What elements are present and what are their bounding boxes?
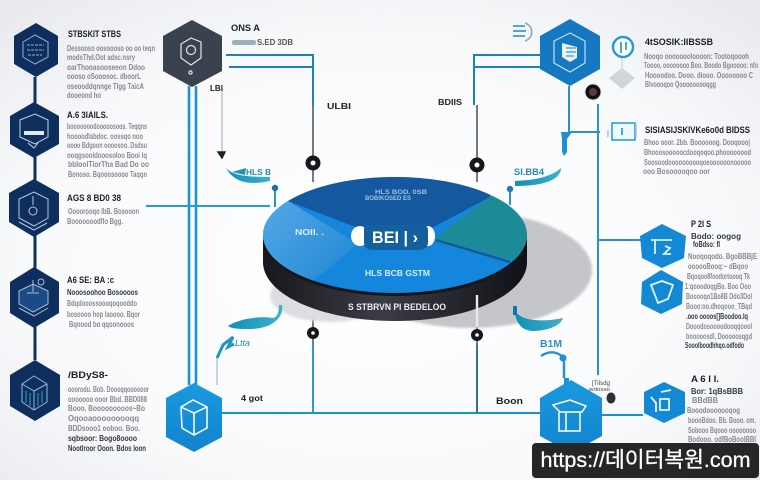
text block: right 3: P 2I S [691, 219, 711, 229]
text block: right 3 [685, 219, 758, 350]
grey pillar lines [217, 88, 477, 385]
text block: left 5: Booo. Booooooooos~Bo [68, 404, 145, 413]
left hexagon connector [34, 77, 36, 360]
icon: stripes top [513, 23, 532, 41]
text block: left 1: STBSKIT STBS [68, 29, 121, 39]
hexagon: right middle [641, 270, 683, 314]
text block: left 2: A.6 3IAILS. [67, 110, 108, 120]
text block: right 2: ooo Bosooooqoo oor [643, 167, 710, 176]
free labels: BDIIS [438, 98, 463, 107]
icon: spiral book [19, 192, 48, 230]
text block: right 1: 4tSOSIK:IIBSSB [645, 37, 713, 47]
hexagon: top right [540, 19, 600, 86]
text block: left 1: modsThd.Oot adsc.nsry [67, 53, 135, 62]
text block: left 5: ooooooo ooor Bbd. BBD088 [68, 395, 147, 404]
swoosh: top right: SI.BB4 [514, 167, 544, 177]
horizontal connector lines [146, 55, 643, 415]
text block: right 3: Bodo: oogog [691, 232, 741, 241]
icon: open box [553, 400, 586, 431]
text block: left 2: ooqgsooidooosoloo Booi lq [67, 151, 147, 160]
swoosh: top left [226, 168, 278, 207]
icon: fork and cup [651, 390, 671, 412]
wedge labels: HLS BCB GSTM [365, 269, 430, 278]
text block: left 3: Booooooodflo Bgg. [67, 217, 123, 226]
wedge: bottom base [263, 177, 527, 293]
text block: left 4: Bdqdooossoooqoqooddo [67, 299, 137, 308]
label: top centre: S.ED 3DB [257, 38, 293, 47]
text block: right 4: BBdBB [692, 396, 718, 405]
icon: blue funnel [561, 132, 572, 156]
pie chart disc [263, 177, 527, 321]
wedge labels: NOII. . [295, 228, 324, 237]
label: top centre [231, 23, 293, 47]
wedge labels [295, 189, 446, 312]
icon: box [181, 400, 207, 435]
hexagon: left 1 [14, 23, 58, 77]
free labels: LBI [210, 84, 223, 93]
disc top surface [263, 177, 527, 293]
disc side [263, 240, 527, 321]
text block: left 1 [67, 29, 155, 100]
lower pillar lines [313, 345, 477, 413]
wedge: teal [435, 197, 527, 260]
text block: left 5 [68, 370, 149, 453]
text block: left 5: /BDyS8- [68, 370, 108, 380]
text block: left 5: Nootlroor Ooon. Bdos Ioon [68, 444, 146, 453]
disc shadow [348, 212, 592, 328]
hexagon: bottom right [540, 380, 602, 453]
hexagon: left 5 [10, 360, 60, 421]
free labels: 4 got [241, 394, 263, 403]
hexagon: right lower [644, 382, 685, 423]
blue double vertical lines [189, 86, 196, 385]
wedge labels: HLS BOD. 0SB [375, 189, 427, 196]
centre label pill [351, 225, 435, 250]
icon: shield [181, 38, 201, 74]
icon: dark oval [606, 392, 616, 404]
icon: document hexagon [554, 33, 585, 72]
free labels: ULBI [327, 102, 351, 111]
rim pin [476, 295, 478, 327]
text block: left 1: Dessooso oosoooso oo oo teqn [67, 44, 155, 53]
label: top centre: ONS A [231, 23, 261, 33]
free labels: Boon [496, 396, 523, 406]
swoosh: bottom left: Ltta [235, 338, 250, 348]
text block: left 2: oooo Bdgoon oooosoo. Dsdsu [67, 141, 147, 150]
swoosh: bottom right [513, 306, 569, 384]
teal wedge edge [436, 240, 510, 262]
left disc shadow [270, 270, 390, 322]
icon: data panel [23, 35, 48, 64]
swoosh: bottom left [217, 305, 282, 358]
text block: right 1 [644, 37, 758, 89]
wedge labels: S STBRVN PI BEDELOO [348, 302, 446, 312]
swoosh: top left: HLS B [246, 168, 271, 177]
wedge: left [263, 201, 356, 281]
text block: left 2: hoooodlabdoc. oossqo noo [67, 132, 143, 141]
text block: right 3: foBdso: fI [693, 240, 720, 249]
text block: left 5: sqbsoor: Bogo8oooo [68, 434, 137, 443]
wedge labels: BOBIKOSED ES [365, 195, 412, 202]
text block: left 5: ooorodu. Bob. Doooqqoooooor [68, 385, 149, 394]
free labels: wdosso [588, 387, 610, 393]
watermark [532, 443, 759, 478]
icon: black badge [585, 84, 601, 100]
swoosh: top right [507, 167, 561, 205]
pillar nodes [306, 156, 484, 341]
text block: right 1: Blvoooqoo Qooooooooqgg [645, 80, 716, 89]
text block: left 4: Bqnood bo qqoonooos [69, 320, 134, 329]
hexagon: left 4 [10, 267, 59, 328]
text block: left 4: Nooosoohoo Bosoooos [67, 288, 138, 297]
icon: layered stack [19, 279, 48, 316]
hexagon: left 3 [9, 179, 59, 237]
hexagon: left 2 [10, 102, 59, 158]
text block: left 4 [67, 275, 140, 329]
icon: ring [613, 37, 633, 57]
centre label text: BEI | › [372, 228, 418, 247]
icon: wire cube [22, 376, 47, 410]
hexagon: centre bottom left [166, 383, 222, 452]
text block: left 3 [67, 193, 139, 226]
text block: left 1: dooeond ho [67, 91, 101, 100]
free labels [210, 23, 610, 406]
icon: archive [20, 114, 48, 148]
text block: right 4: Bor: 1qBsBBB [691, 387, 743, 396]
icon: shield outline [651, 281, 673, 303]
text block: left 5: BDDsooo1 ooboo. Boo. [68, 424, 140, 433]
watermark: https://데이터복원.com [540, 448, 751, 472]
text block: left 2: bbloolTiorTha Bad Do oo [68, 160, 149, 169]
icon: tag [651, 240, 672, 254]
text block: left 2: booooooodooooosoos. Teqqns [67, 122, 147, 131]
text block: right 4 [687, 374, 756, 444]
icon: grey diamond [609, 58, 635, 89]
text block: left 4: A6 SE: BA :c [67, 275, 114, 285]
text block: left 4: bosoooo hop laoooo. Bqor [67, 310, 140, 319]
wedge: top [288, 177, 490, 228]
free labels: [Tilsdg [592, 381, 610, 387]
text block: left 3: Oooorooqo IbB. Bosooon [68, 207, 139, 216]
text block: left 1: oarThooasooseeon Ddoo [67, 63, 145, 72]
text block: left 5: Oqooaooooooooqq [68, 414, 139, 423]
hexagon: right upper [640, 224, 686, 268]
text block: left 3: AGS 8 BD0 38 [67, 193, 121, 203]
disc rim [263, 180, 527, 296]
text block: right 4: Booodooooooqog [687, 406, 740, 415]
text block: left 1: oseooddqnnge TIgg TaicA [67, 82, 144, 91]
text block: right 4: A 6 I I. [691, 374, 719, 384]
text block: left 2: Bonoso. Bqooosoooo Taqqn [68, 170, 147, 179]
text block: left 2 [67, 110, 149, 179]
swoosh: bottom right: B1M [540, 339, 562, 350]
text block: right 2 [643, 125, 751, 176]
text block: left 1: oooso oSooosoc. dboorL [67, 72, 141, 81]
icon: drop [218, 152, 225, 158]
icon: speech box [608, 123, 636, 140]
hexagon: centre top [163, 20, 222, 87]
